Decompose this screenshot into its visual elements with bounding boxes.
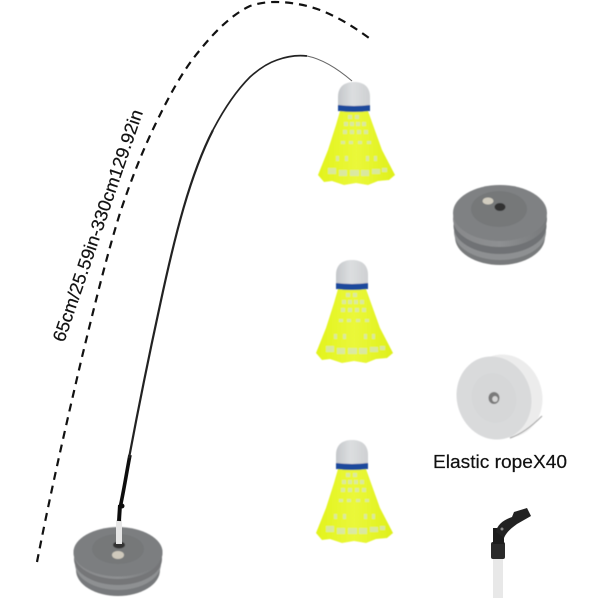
- shuttlecock top: [318, 82, 395, 185]
- dashed arc: flight height range: [37, 2, 369, 562]
- left weighted base with pole socket: [74, 527, 162, 596]
- fibre rod with elastic tip: [116, 56, 352, 544]
- length label: 65cm/25.59in-330cm129.92in: [49, 107, 147, 344]
- shuttlecock middle: [316, 260, 393, 363]
- angled pole connector: [491, 508, 531, 598]
- rope caption: Elastic ropeX40: [433, 452, 567, 472]
- shuttlecock bottom: [316, 440, 393, 543]
- elastic rope roll: [446, 345, 553, 449]
- weighted base accessory: [453, 185, 547, 265]
